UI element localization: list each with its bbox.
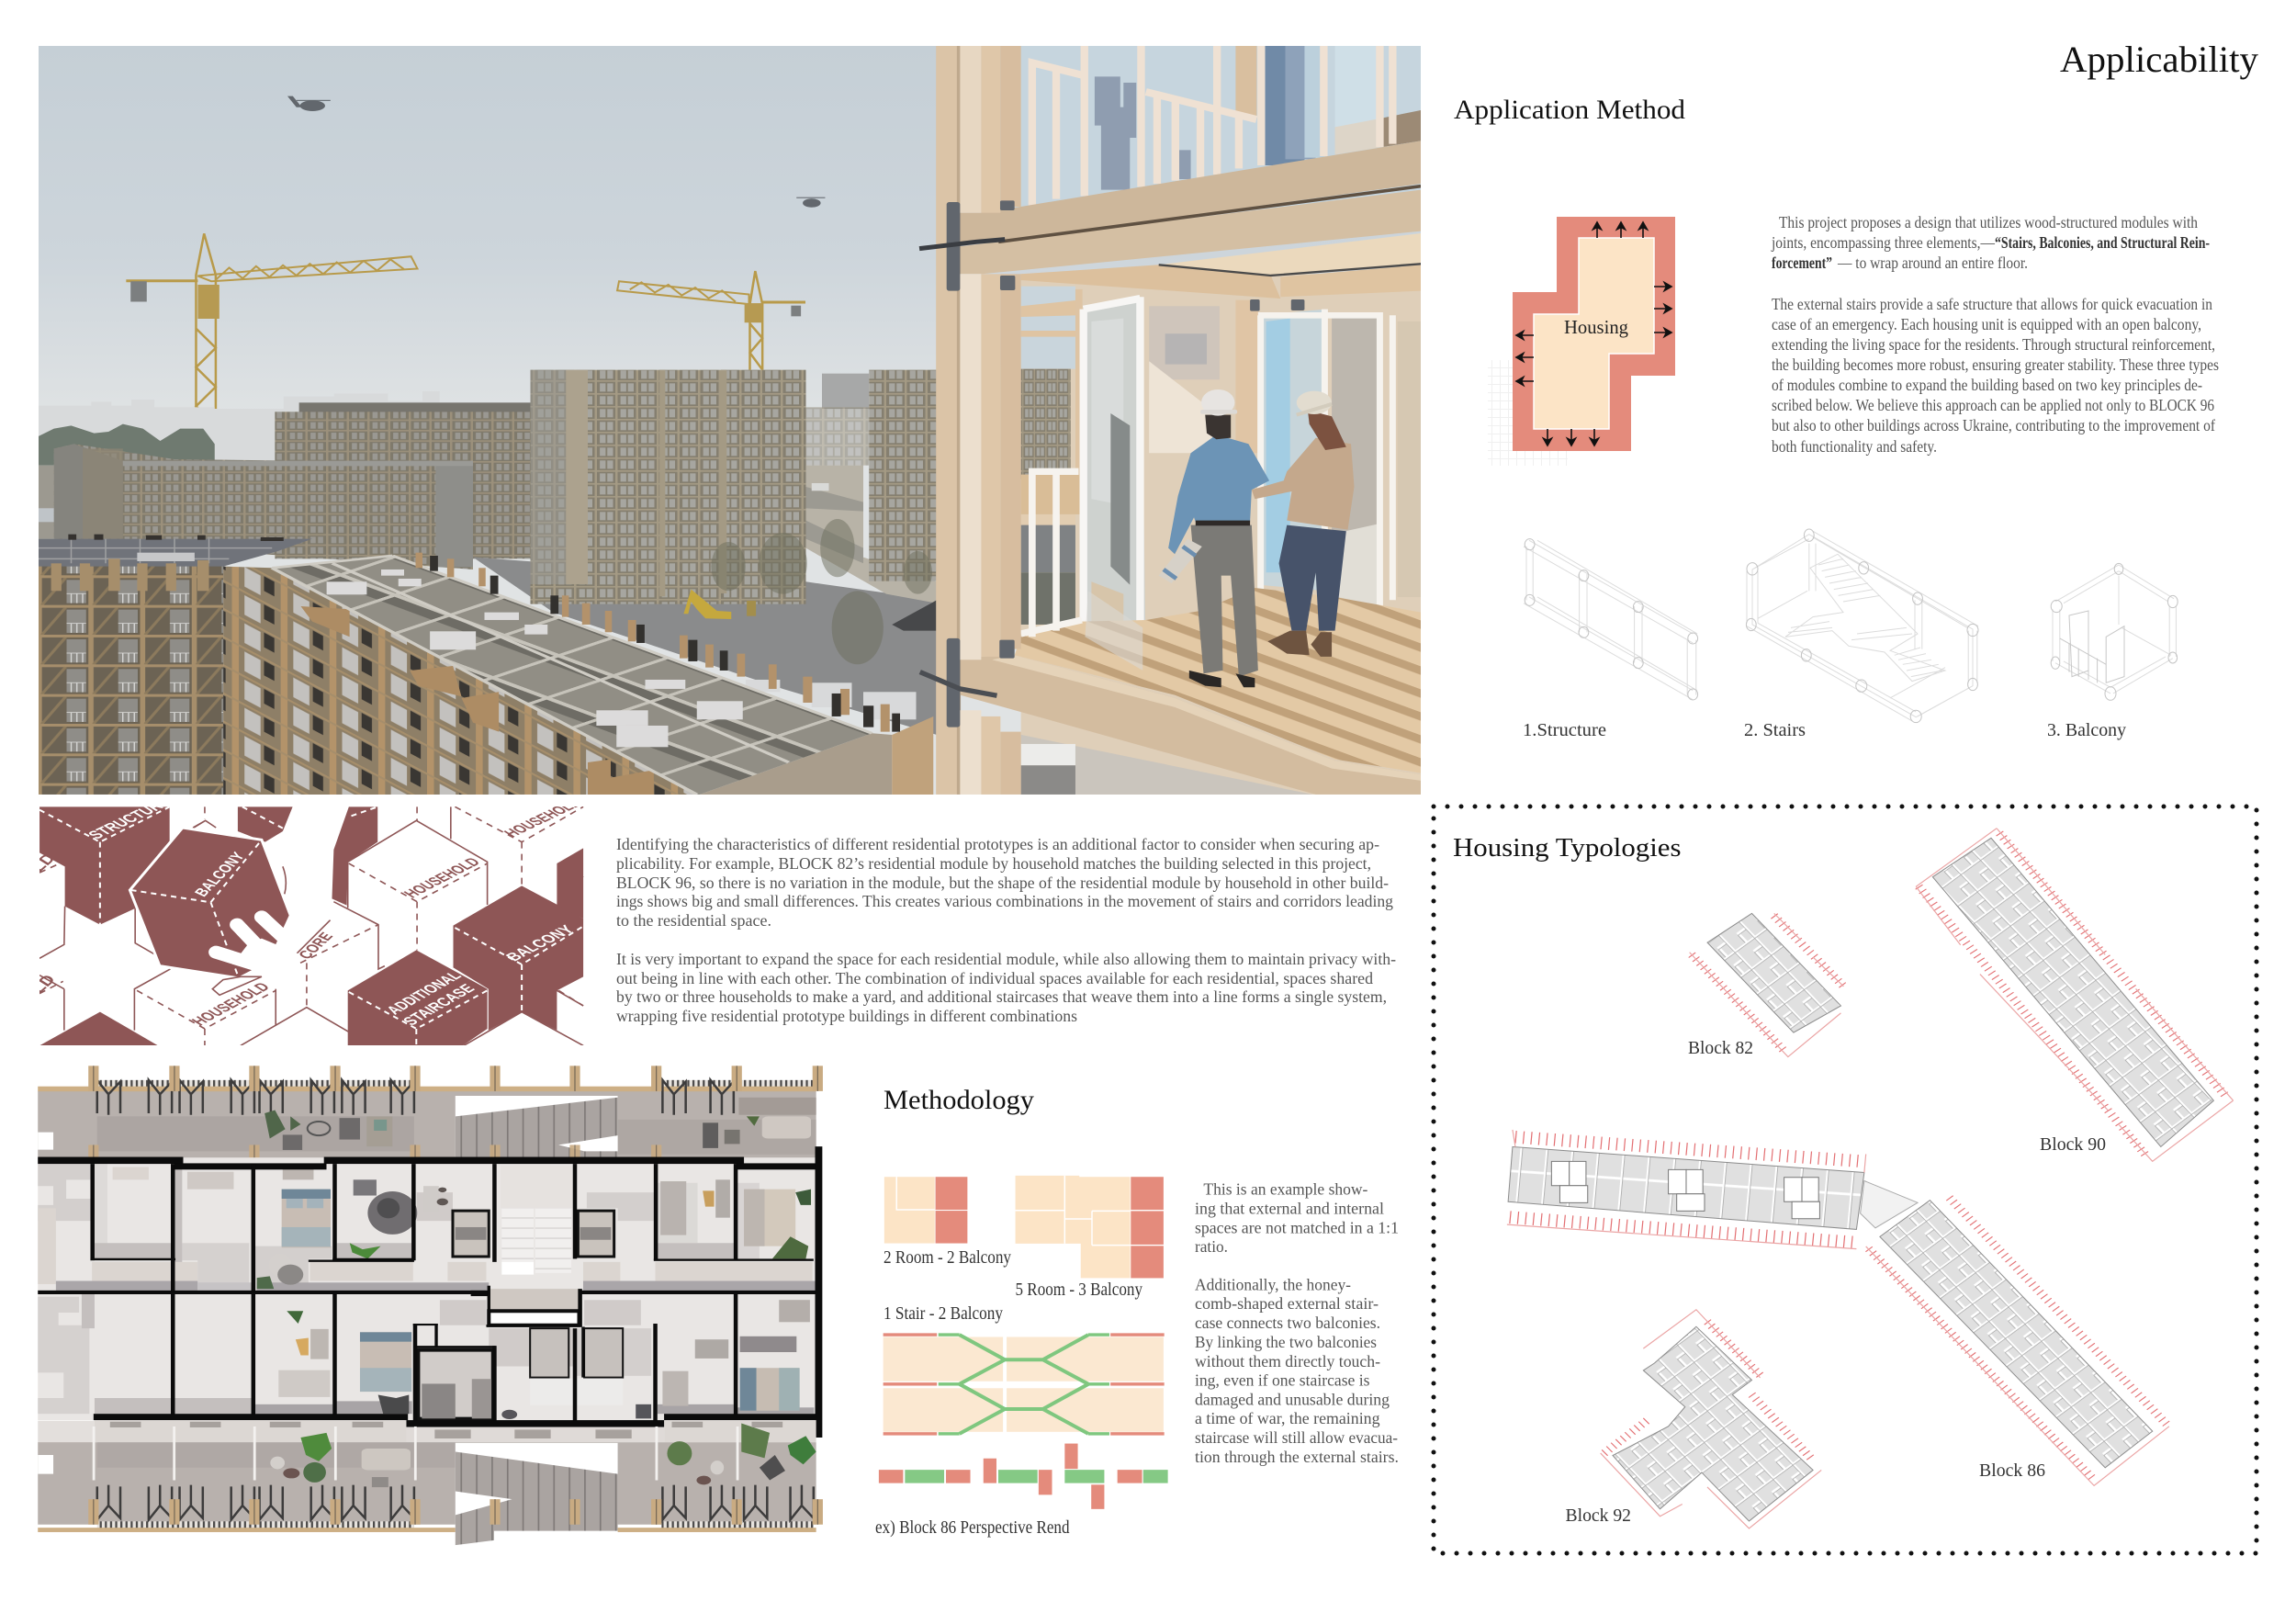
- 5 room 3 balcony plan: [1016, 1176, 1164, 1278]
- methodology paragraph: This is an example show-: [1203, 1179, 1368, 1198]
- application method paragraph: case of an emergency. Each housing unit is equipped with an open balcony,: [1772, 315, 2201, 333]
- block 90 axonometric: [1916, 829, 2234, 1161]
- cube outlines: [39, 806, 583, 1045]
- methodology paragraph: [1195, 1179, 1399, 1466]
- application method paragraph: joints, encompassing three elements,—: [1771, 233, 1995, 252]
- application method paragraph: — to wrap around an entire floor.: [1837, 254, 2028, 272]
- methodology labels: [875, 1247, 1142, 1538]
- isometric module: balcony: [2051, 563, 2178, 700]
- methodology diagrams: [879, 1176, 1168, 1509]
- posts top: [88, 1066, 823, 1091]
- bottom external stairs: [456, 1443, 618, 1545]
- ceiling soffit: [1159, 233, 1421, 276]
- methodology paragraph: By linking the two balconies: [1195, 1333, 1377, 1351]
- residential prototypes paragraph: [616, 835, 1396, 1025]
- below floor opening: [1021, 735, 1312, 795]
- block labels: [1565, 1038, 2106, 1526]
- module cubes illustration with hand: [28, 795, 586, 1045]
- application method paragraph: scribed below. We believe this approach can be applied not only to BLOCK 96: [1772, 396, 2214, 414]
- white dashed edges: [39, 806, 583, 1045]
- block 86 module strip: [879, 1444, 1168, 1509]
- balcony floor: [1015, 588, 1421, 773]
- methodology paragraph: Additionally, the honey-: [1195, 1275, 1351, 1293]
- module labels: 3. Balcony: [2047, 720, 2126, 740]
- corridor shadows upper: [56, 1281, 816, 1291]
- sky: [39, 46, 1421, 795]
- lower furniture: [278, 1289, 810, 1419]
- methodology paragraph: without them directly touch-: [1195, 1352, 1380, 1370]
- block labels: Block 90: [2040, 1134, 2106, 1155]
- upper white rails: [1032, 46, 1392, 205]
- floor plan: [38, 1066, 823, 1545]
- stair connection plan: [884, 1333, 1165, 1436]
- cube labels: BALCONY: [502, 923, 579, 964]
- cube labels: CORE: [295, 930, 336, 962]
- residential prototypes paragraph: by two or three households to make a yard, and additional staircases that weave them into a line forms a single system,: [616, 987, 1387, 1006]
- hero render: balcony overlooking construction site: [39, 46, 1421, 795]
- glass door left: [1082, 303, 1145, 621]
- module labels: [1523, 720, 2126, 740]
- cube labels: ADDITIONAL: [383, 969, 466, 1017]
- isometric module: stairs: [1746, 529, 1978, 723]
- heading: Housing Typologies: Housing Typologies: [1453, 833, 1681, 863]
- units on terrace strip: [110, 1422, 782, 1438]
- heading: Application Method: Application Method: [1454, 95, 1685, 125]
- methodology paragraph: a time of war, the remaining: [1195, 1409, 1380, 1427]
- excavator: [683, 590, 756, 619]
- lower beam: [960, 655, 1421, 795]
- bedroom and furniture upper row: [257, 1166, 811, 1289]
- right buildings: [822, 374, 869, 409]
- cube labels: LD: [28, 851, 60, 874]
- front railing: [1021, 470, 1082, 637]
- block 82 axonometric: [1690, 913, 1843, 1057]
- methodology paragraph: case connects two balconies.: [1195, 1314, 1380, 1332]
- block 86 axonometric: [1866, 1198, 2169, 1485]
- cube labels: LD: [28, 972, 60, 996]
- cube labels: HOUSEHOLD: [188, 980, 274, 1028]
- methodology paragraph: comb-shaped external stair-: [1195, 1294, 1379, 1313]
- isometric module: structure: [1524, 539, 1698, 700]
- application method paragraph: both functionality and safety.: [1772, 437, 1937, 456]
- black walls: [38, 1146, 822, 1438]
- upper room shadows: [38, 1164, 760, 1291]
- stair cores: [1551, 1161, 1819, 1219]
- cube labels: STRUCTURE: [84, 795, 176, 841]
- posts and fins along roof edge: [415, 553, 890, 732]
- heading: Methodology: Methodology: [884, 1085, 1034, 1115]
- interior behind balcony: [1021, 274, 1421, 795]
- methodology paragraph: ing that external and internal: [1195, 1200, 1384, 1218]
- application method paragraph: The external stairs provide a safe structure that allows for quick evacuation in: [1772, 295, 2212, 313]
- white site cabins: [746, 680, 917, 719]
- 2 room 2 balcony plan: [884, 1177, 967, 1244]
- lower terrace strip: [38, 1421, 95, 1443]
- distant skyline: [39, 403, 299, 460]
- tower roof: [39, 539, 312, 567]
- faint dot grid: [1488, 360, 1568, 466]
- residential prototypes paragraph: out being in line with each other. The combination of individual spaces available for each residential, spaces shared: [616, 969, 1373, 987]
- folding doors top: [97, 1080, 734, 1115]
- residential prototypes paragraph: plicability. For example, BLOCK 82’s residential module by household matches the building selected in this project,: [616, 854, 1371, 873]
- block 92 axonometric: [1601, 1310, 1821, 1528]
- glass door right: [1264, 310, 1322, 590]
- application method paragraph: extending the living space for the residents. Through structural reinforcement,: [1772, 335, 2215, 354]
- man in blue shirt: [1159, 389, 1269, 687]
- plaza and road: [473, 558, 937, 735]
- end wall: [700, 733, 892, 795]
- folding doors bottom: [97, 1485, 814, 1520]
- application method paragraph: of modules combine to expand the building based on two key principles de-: [1772, 376, 2202, 394]
- upper beams: [960, 141, 1421, 242]
- lower room shadows: [38, 1294, 814, 1414]
- block labels: Block 86: [1979, 1460, 2045, 1481]
- application method paragraph: the building becomes more robust, ensuring greater stability. These three types: [1772, 355, 2219, 374]
- central stair and core upper: [453, 1166, 614, 1275]
- posts bottom: [88, 1499, 823, 1525]
- housing label: Housing: [1564, 316, 1628, 338]
- roof cell grid: [272, 556, 872, 795]
- left building: [54, 444, 473, 570]
- module labels: 2. Stairs: [1744, 720, 1806, 740]
- application method paragraph: This project proposes a design that utilizes wood-structured modules with: [1779, 213, 2198, 231]
- balcony building frame and occupants: [919, 46, 1421, 795]
- block 96 axonometric with bridge: [1507, 1130, 1918, 1249]
- white service cores on roof: [327, 570, 743, 747]
- wood column center: [1235, 300, 1258, 453]
- furniture bottom balconies: [270, 1424, 816, 1487]
- cube labels: BALCONY: [192, 850, 249, 899]
- methodology labels: 5 Room - 3 Balcony: [1016, 1280, 1142, 1300]
- cube labels: [28, 795, 586, 1028]
- reflected buildings on upper glass: [1095, 76, 1191, 190]
- treeline: [39, 424, 215, 466]
- balcony shadows: [97, 1116, 414, 1151]
- housing core: [1534, 238, 1654, 429]
- module labels: 1.Structure: [1523, 720, 1606, 740]
- residential prototypes paragraph: BLOCK 96, so there is no variation in the module, but the shape of the residential module by household in other build-: [616, 874, 1389, 892]
- woman in beige jacket: [1252, 391, 1355, 657]
- balcony ring: [1513, 217, 1675, 451]
- housing expansion diagram: [1488, 217, 1675, 466]
- residential prototypes paragraph: Identifying the characteristics of different residential prototypes is an additional factor to consider when securing ap-: [616, 835, 1379, 853]
- tall building: [531, 370, 806, 604]
- application method paragraph: [1771, 213, 2219, 456]
- furniture top balconies: [264, 1098, 816, 1150]
- wardrobe strips: [38, 1166, 813, 1284]
- trees: [711, 519, 932, 664]
- steel joints: [947, 200, 1304, 727]
- block labels: Block 92: [1565, 1506, 1631, 1526]
- application method paragraph: but also to other buildings across Ukraine, contributing to the improvement of: [1772, 416, 2215, 434]
- dotted frame: housing typologies panel: [1434, 806, 2257, 1553]
- cranes and helicopters: [126, 96, 825, 409]
- city: midground buildings and foreground roof: [39, 370, 937, 795]
- methodology paragraph: ing, even if one staircase is: [1195, 1370, 1370, 1389]
- interior base: [38, 1157, 816, 1420]
- held balcony cube: [129, 828, 290, 978]
- methodology paragraph: ratio.: [1195, 1237, 1228, 1256]
- residential prototypes paragraph: to the residential space.: [616, 911, 771, 930]
- block labels: Block 82: [1688, 1038, 1753, 1058]
- cube labels: HOUSEHOLD: [501, 796, 586, 840]
- methodology labels: 1 Stair - 2 Balcony: [884, 1303, 1003, 1324]
- interior stair seen through glass: [1149, 306, 1220, 379]
- methodology paragraph: tion through the external stairs.: [1195, 1448, 1399, 1466]
- side facade: [223, 567, 697, 795]
- expansion arrows: [1516, 222, 1671, 445]
- top balcony band: [38, 1091, 816, 1159]
- methodology paragraph: staircase will still allow evacua-: [1195, 1428, 1398, 1447]
- title: Applicability: Applicability: [2060, 39, 2258, 80]
- application method paragraph: “Stairs, Balconies, and Structural Rein-: [1995, 233, 2210, 252]
- top external stairs: [456, 1096, 618, 1157]
- residential prototypes paragraph: It is very important to expand the space for each residential module, while also allowing them to maintain privacy with-: [616, 950, 1396, 968]
- brown cube faces: [39, 806, 583, 1045]
- residential prototypes paragraph: ings shows big and small differences. This creates various combinations in the movement of stairs and corridors leading: [616, 892, 1393, 910]
- foreground tower: [39, 563, 223, 795]
- cube labels: STAIRCASE: [400, 982, 478, 1028]
- upper floor glazing: [1021, 46, 1421, 209]
- methodology labels: ex) Block 86 Perspective Rend: [875, 1517, 1069, 1538]
- application method paragraph: forcement”: [1772, 254, 1832, 272]
- main columns: [936, 46, 957, 795]
- back building: [299, 402, 531, 413]
- methodology paragraph: damaged and unusable during: [1195, 1391, 1390, 1409]
- residential prototypes paragraph: wrapping five residential prototype buildings in different combinations: [616, 1007, 1077, 1025]
- methodology paragraph: spaces are not matched in a 1:1: [1195, 1218, 1399, 1236]
- cube labels: HOUSEHOLD: [400, 855, 485, 900]
- methodology labels: 2 Room - 2 Balcony: [884, 1247, 1011, 1268]
- hand: [212, 917, 298, 995]
- bottom balcony: [38, 1442, 816, 1525]
